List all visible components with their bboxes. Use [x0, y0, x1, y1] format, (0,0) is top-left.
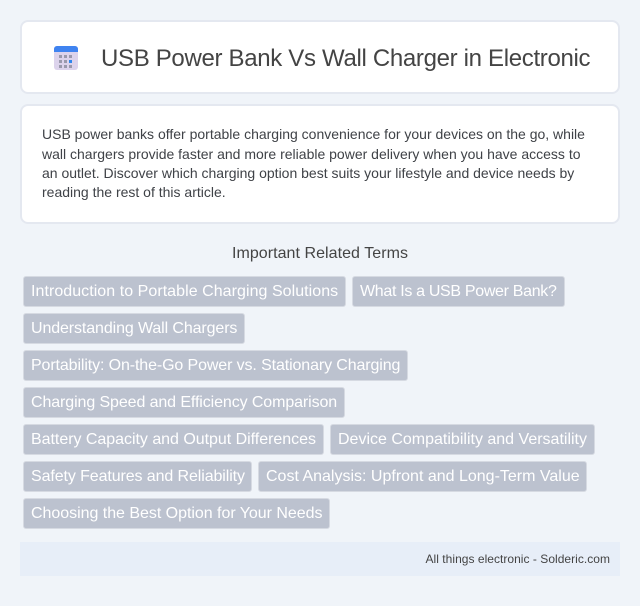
- chip: Safety Features and Reliability: [31, 468, 245, 485]
- chip: What Is a USB Power Bank?: [360, 283, 557, 300]
- chip: [23, 461, 252, 492]
- chip: Introduction to Portable Charging Solutions: [31, 283, 338, 300]
- chip: Battery Capacity and Output Differences: [31, 431, 316, 448]
- icon: calendar: [54, 46, 78, 70]
- intro paragraph: [42, 126, 585, 200]
- title: USB Power Bank Vs Wall Charger in Electronic: [101, 45, 590, 72]
- chip: [23, 498, 330, 529]
- chip: [23, 276, 346, 307]
- chip: Cost Analysis: Upfront and Long-Term Value: [266, 468, 580, 485]
- heading: important related terms: Important Related Terms: [232, 245, 408, 262]
- header card: [20, 20, 620, 94]
- chip: [23, 387, 345, 418]
- related terms chips: [23, 276, 595, 529]
- chip: [23, 350, 408, 381]
- intro paragraph: USB power banks offer portable charging convenience for your devices on the go, while: [42, 126, 585, 142]
- chip: Charging Speed and Efficiency Comparison: [31, 394, 337, 411]
- chip: [352, 276, 565, 307]
- chip: Understanding Wall Chargers: [31, 320, 237, 337]
- footer bar: [20, 542, 620, 576]
- footer credit: All things electronic - Solderic.com: [426, 552, 610, 566]
- chip: [330, 424, 595, 455]
- chip: Portability: On-the-Go Power vs. Stationary Charging: [31, 357, 400, 374]
- chip: [23, 424, 324, 455]
- chip: Choosing the Best Option for Your Needs: [31, 505, 322, 522]
- intro paragraph: an outlet. Discover which charging option best suits your lifestyle and device needs by: [42, 165, 574, 181]
- chip: Device Compatibility and Versatility: [338, 431, 587, 448]
- chip: [23, 313, 245, 344]
- chip: [258, 461, 587, 492]
- intro text card: [20, 104, 620, 224]
- intro paragraph: reading the rest of this article.: [42, 184, 226, 200]
- intro paragraph: wall chargers provide faster and more reliable power delivery when you have access to: [42, 146, 580, 162]
